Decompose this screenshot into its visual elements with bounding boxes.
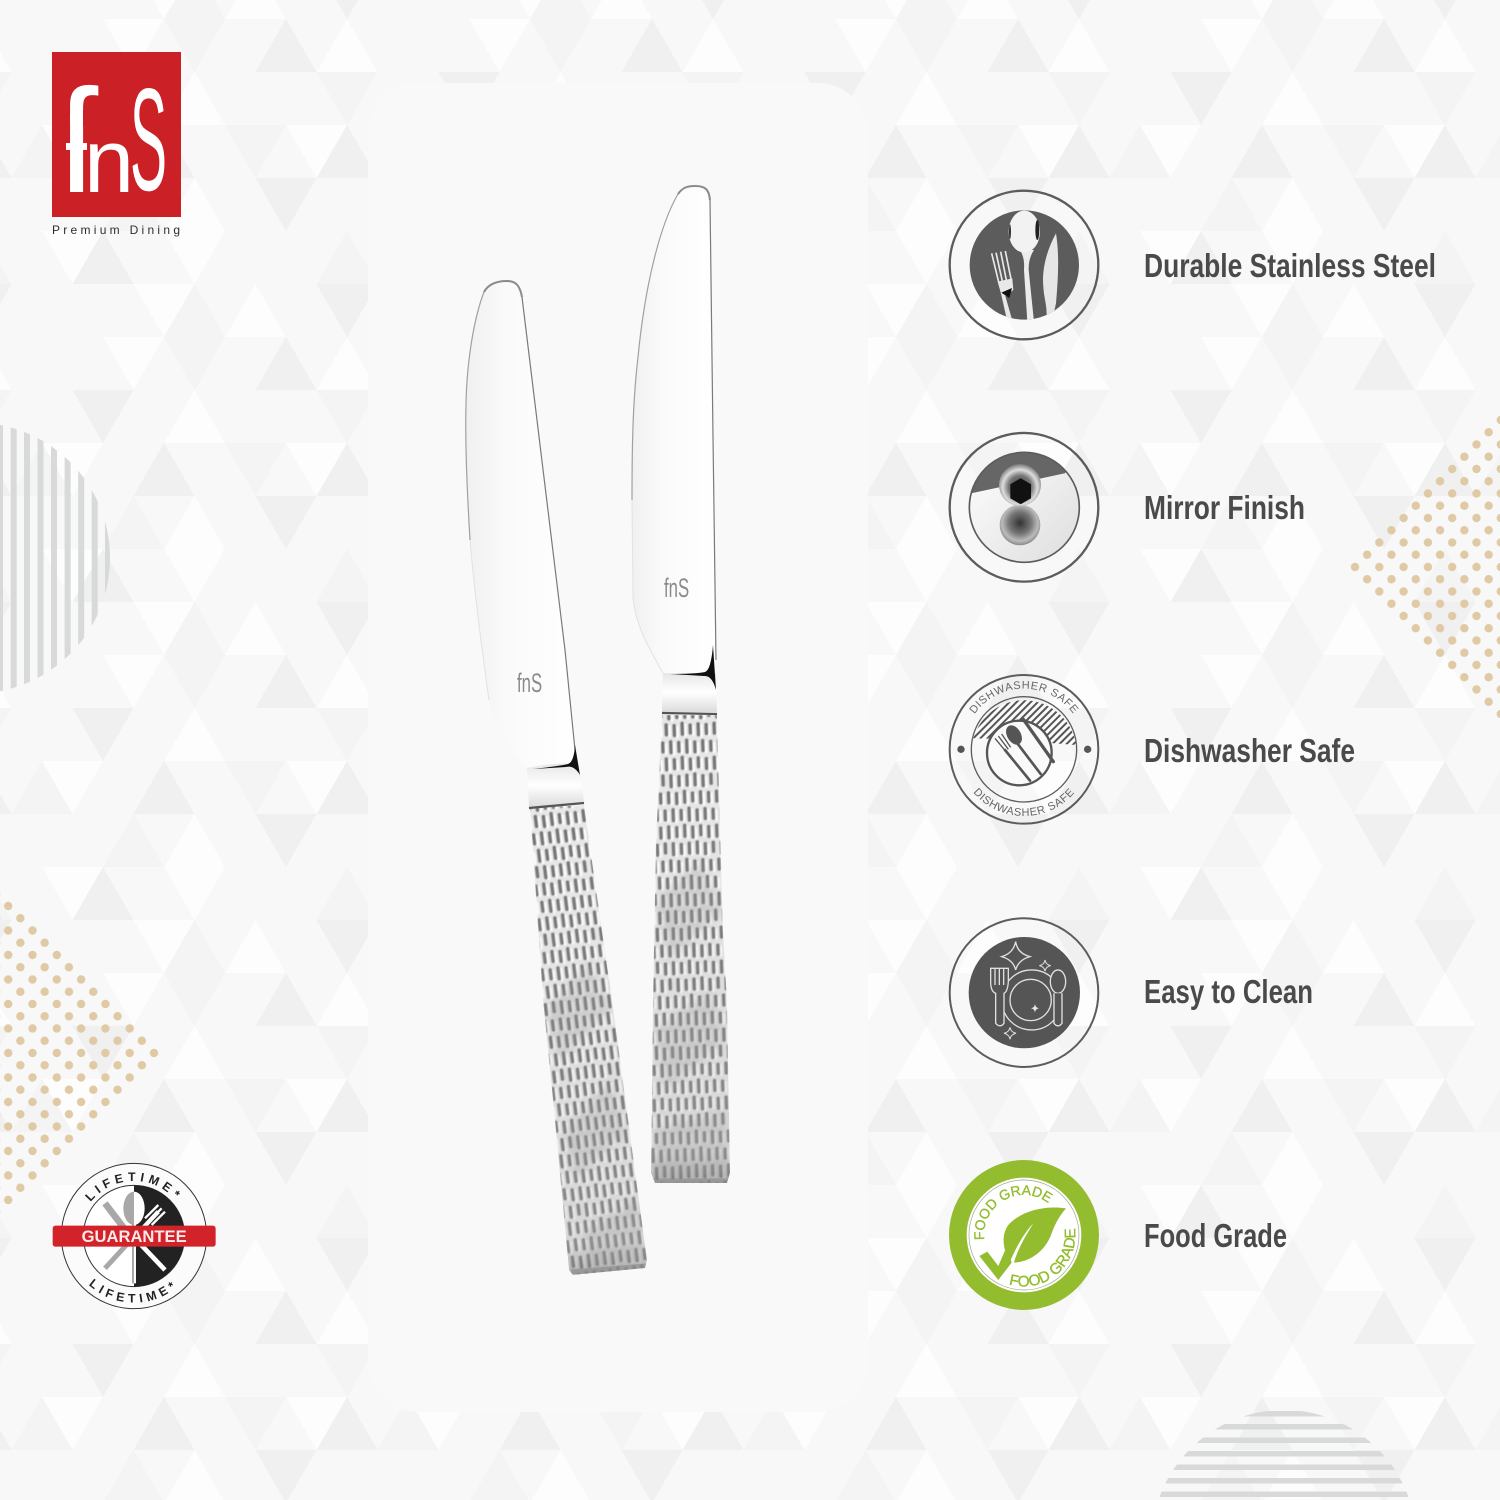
label: easy to clean: Easy to Clean <box>1144 973 1313 1010</box>
badge cutlery, white half <box>134 1192 167 1284</box>
badge ribbon text: GUARANTEE <box>82 1227 187 1246</box>
feature: food grade <box>949 1160 1287 1310</box>
seal top text: DISHWASHER SAFE <box>969 681 1079 714</box>
left striped half circle <box>0 425 110 692</box>
left dotted diamond <box>0 890 163 1216</box>
label: durable stainless steel: Durable Stainless Steel <box>1144 247 1436 284</box>
label: mirror finish: Mirror Finish <box>1144 489 1305 526</box>
right knife engraved logo: fnS <box>664 573 689 603</box>
logo mark: S <box>130 59 167 222</box>
badge rings <box>61 1163 207 1309</box>
left knife bolster <box>527 764 584 807</box>
icon: cutlery in circle <box>950 191 1098 339</box>
icon: sparkling plate <box>950 918 1098 1067</box>
right knife blade <box>632 186 716 673</box>
logo mark <box>53 59 167 224</box>
seal bottom text: DISHWASHER SAFE <box>974 788 1074 816</box>
feature: dishwasher safe <box>948 674 1355 825</box>
right dotted diamond <box>1346 405 1500 729</box>
icon: mirror ball <box>950 433 1098 582</box>
right knife hammered handle <box>651 715 730 1183</box>
badge top text: LIFETIME* <box>84 1172 180 1202</box>
lifetime guarantee badge <box>52 1162 216 1310</box>
leaf <box>1004 1207 1066 1263</box>
seal cutlery <box>995 719 1053 781</box>
badge bottom text: LIFETIME* <box>89 1278 173 1302</box>
badge cutlery, grey half <box>102 1192 134 1284</box>
left knife engraved logo: fnS <box>517 668 542 698</box>
bottom striped half circle <box>1160 1411 1408 1497</box>
icon: food grade seal <box>949 1160 1099 1310</box>
knife: right (taller) <box>632 186 730 1183</box>
check mark <box>979 1247 1012 1280</box>
label: food grade: Food Grade <box>1144 1217 1287 1254</box>
left knife hammered handle <box>530 805 647 1275</box>
icon: dishwasher safe seal <box>948 674 1100 825</box>
left knife blade <box>466 281 581 775</box>
logo mark: f <box>57 59 99 224</box>
label: dishwasher safe: Dishwasher Safe <box>1144 732 1355 769</box>
feature: mirror finish <box>950 433 1305 582</box>
logo tagline: Premium Dining <box>52 223 180 237</box>
feature: durable stainless steel <box>950 191 1436 339</box>
seal top text: FOOD GRADE <box>974 1185 1053 1240</box>
logo mark: n <box>84 112 134 212</box>
logo: FnS Premium Dining <box>52 52 181 237</box>
feature: easy to clean <box>950 918 1313 1067</box>
knife: left (shorter) <box>466 281 647 1275</box>
central product panel <box>368 83 868 1412</box>
logo red square <box>52 52 181 217</box>
badge red ribbon <box>53 1226 216 1247</box>
right knife bolster <box>662 673 717 712</box>
seal bottom text: FOOD GRADE <box>1010 1228 1076 1287</box>
